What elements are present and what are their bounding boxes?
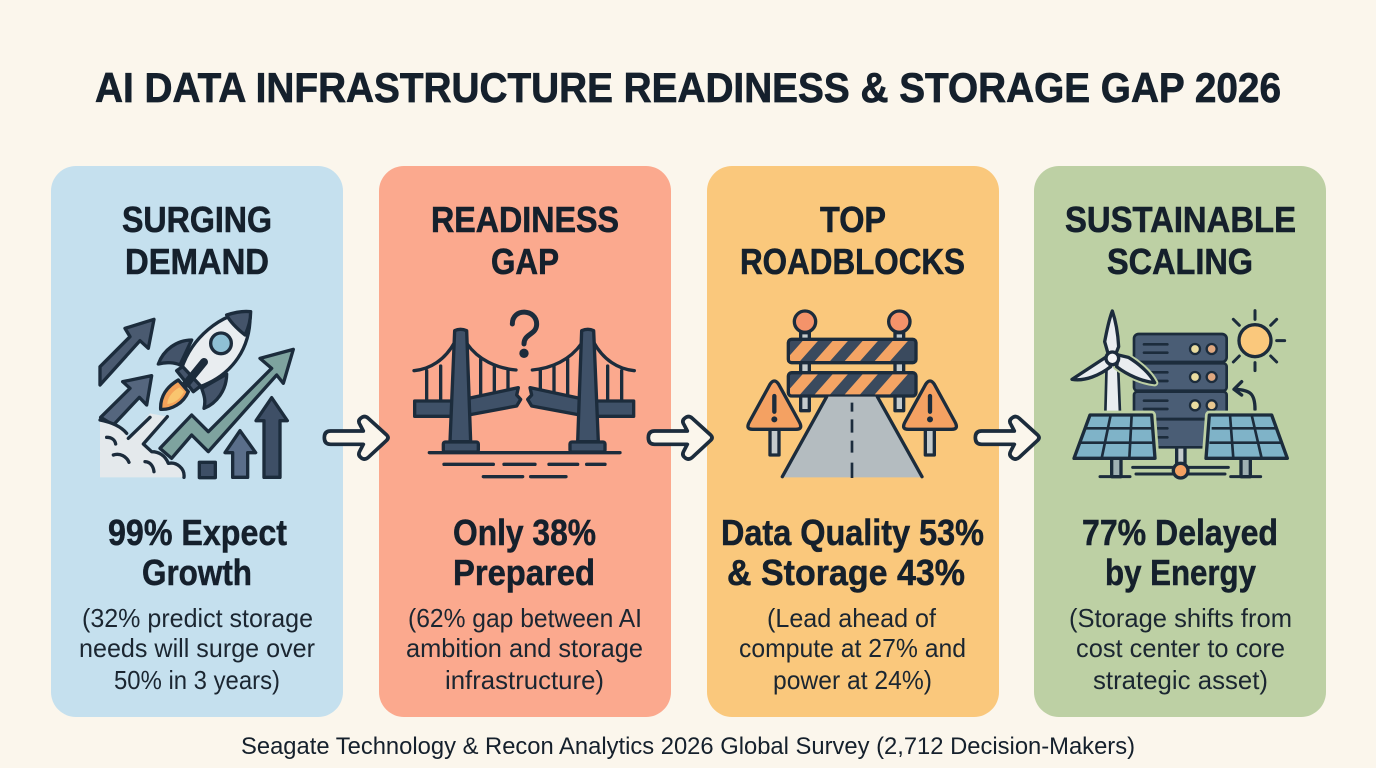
stat: 77% delayed by energy: by Energy: [1105, 552, 1256, 593]
heading: readiness gap: READINESS: [431, 199, 619, 240]
detail text: top roadblocks: compute at 27% and: [739, 633, 966, 663]
heading: surging demand: SURGING: [122, 199, 272, 240]
detail text: top roadblocks: [739, 603, 966, 695]
detail text: sustainable scaling: [1069, 603, 1292, 695]
detail text: sustainable scaling: strategic asset): [1093, 665, 1268, 695]
stat: 99% expect growth: 99% Expect: [108, 512, 287, 553]
detail text: readiness gap: infrastructure): [445, 665, 604, 695]
panel: readiness gap: [379, 166, 671, 717]
panel: top roadblocks: [707, 166, 999, 717]
heading: top roadblocks: TOP: [820, 199, 886, 240]
heading: readiness gap: GAP: [491, 241, 559, 282]
detail text: sustainable scaling: cost center to core: [1076, 633, 1285, 663]
detail text: sustainable scaling: (Storage shifts from: [1069, 603, 1292, 633]
arrow: demand to readiness: [324, 417, 388, 459]
heading: readiness gap: [431, 199, 619, 282]
panel: surging demand: [51, 166, 343, 717]
heading: surging demand: DEMAND: [125, 241, 269, 282]
source footer: Seagate Technology & Recon Analytics 2026 Global Survey (2,712 Decision-Makers): [241, 733, 1135, 760]
icon: broken bridge with question mark: [414, 312, 634, 477]
heading: sustainable scaling: SCALING: [1107, 241, 1253, 282]
heading: sustainable scaling: [1065, 199, 1296, 282]
stat: data quality and storage: & Storage 43%: [727, 552, 965, 593]
detail text: readiness gap: (62% gap between AI: [408, 603, 642, 633]
stat: 77% delayed by energy: 77% Delayed: [1082, 512, 1278, 553]
icon: road barrier and warning signs: [748, 311, 956, 478]
detail text: top roadblocks: power at 24%): [773, 665, 932, 695]
stat: 99% expect growth: Growth: [142, 552, 252, 593]
stat: only 38% prepared: Prepared: [453, 552, 595, 593]
detail text: surging demand: 50% in 3 years): [114, 665, 280, 695]
arrow: readiness to roadblocks: [648, 417, 712, 459]
heading: top roadblocks: [740, 199, 965, 282]
stat: data quality and storage: [721, 512, 984, 593]
detail text: readiness gap: [406, 603, 643, 695]
detail text: surging demand: needs will surge over: [79, 633, 315, 663]
panel: sustainable scaling: [1034, 166, 1326, 717]
icon: rocket and growth arrows: [100, 311, 293, 478]
heading: sustainable scaling: SUSTAINABLE: [1065, 199, 1296, 240]
detail text: top roadblocks: (Lead ahead of: [767, 603, 937, 633]
stat: only 38% prepared: [453, 512, 596, 593]
detail text: surging demand: [79, 603, 315, 695]
icon: server, wind turbine, solar panels and sun: [1072, 311, 1287, 478]
arrow: roadblocks to scaling: [975, 417, 1039, 459]
heading: top roadblocks: ROADBLOCKS: [740, 241, 965, 282]
detail text: surging demand: (32% predict storage: [82, 603, 313, 633]
heading: surging demand: [122, 199, 272, 282]
stat: 99% expect growth: [108, 512, 287, 593]
title: AI DATA INFRASTRUCTURE READINESS & STORAGE GAP 2026: [95, 64, 1281, 111]
stat: data quality and storage: Data Quality 53%: [721, 512, 984, 553]
stat: only 38% prepared: Only 38%: [453, 512, 596, 553]
stat: 77% delayed by energy: [1082, 512, 1278, 593]
detail text: readiness gap: ambition and storage: [406, 633, 643, 663]
